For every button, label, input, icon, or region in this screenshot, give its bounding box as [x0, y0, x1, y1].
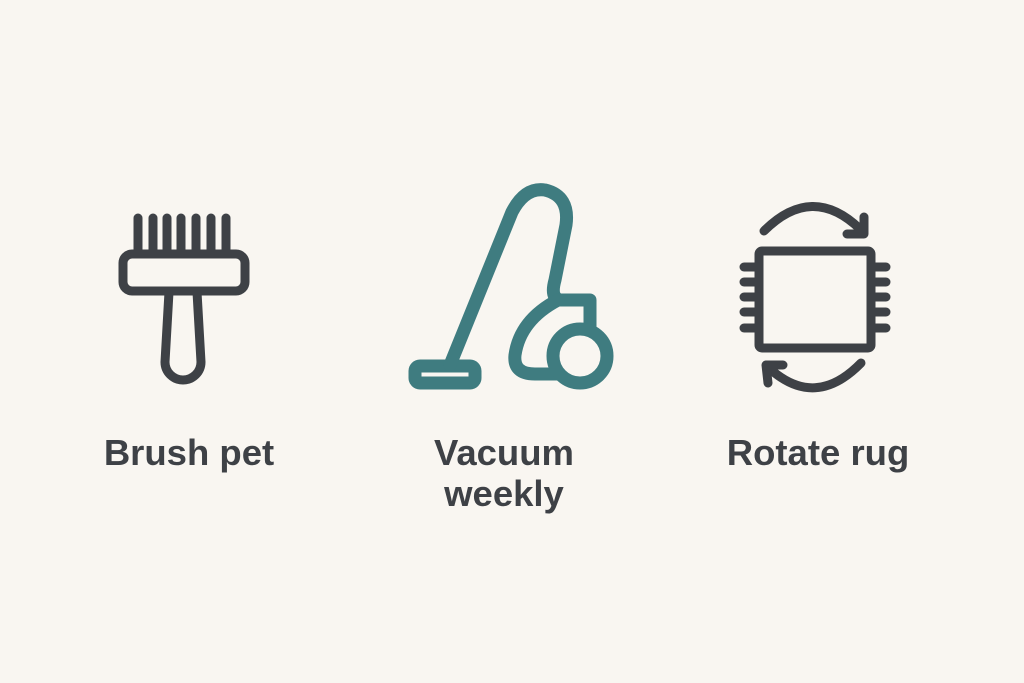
- label: rotate rug: Rotate rug: [727, 432, 909, 473]
- label: vacuum weekly: weekly: [444, 473, 564, 514]
- label: vacuum weekly: [434, 432, 574, 514]
- label: vacuum weekly: Vacuum: [434, 432, 574, 473]
- label: brush pet: Brush pet: [104, 432, 274, 473]
